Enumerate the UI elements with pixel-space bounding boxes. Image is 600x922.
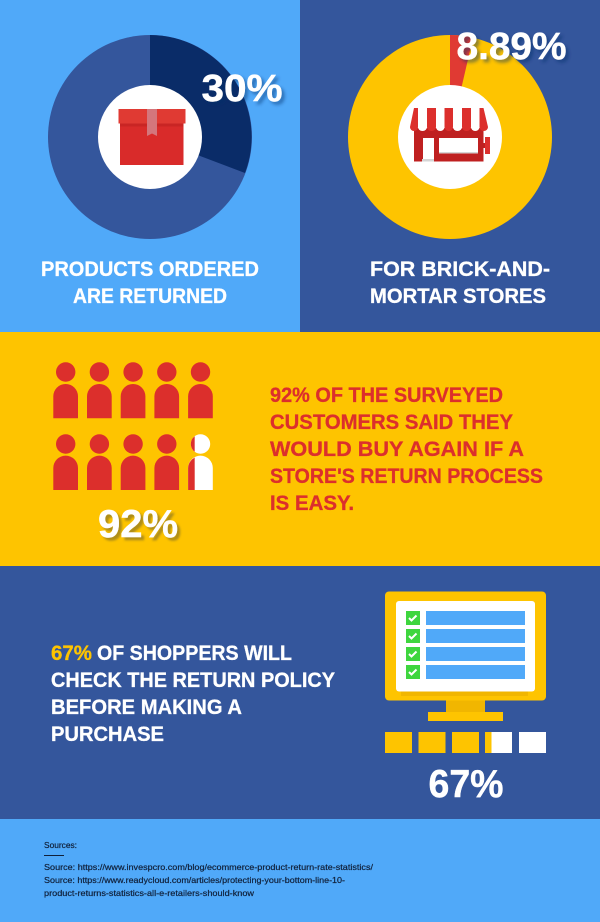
source list: Source: https://www.readycloud.com/articles/protecting-your-bottom-line-10- <box>44 876 345 885</box>
stat: 92%: 92% <box>98 503 178 546</box>
stat: 67%: 67% <box>428 763 504 806</box>
caption: for brick-and-mortar stores: FOR BRICK-AND- <box>370 258 550 281</box>
caption: for brick-and-mortar stores <box>370 258 550 308</box>
panel: brick-and-mortar stores <box>300 0 600 332</box>
text block: repeat purchase statement: 92% OF THE SURVEYED <box>270 384 503 407</box>
pictogram: ten people, 92% filled <box>53 362 213 490</box>
text block: repeat purchase statement: IS EASY. <box>270 492 354 515</box>
progress squares: 67% filled <box>385 732 546 753</box>
source list <box>44 863 374 898</box>
text block: repeat purchase statement: STORE'S RETURN PROCESS <box>270 465 543 488</box>
icon: monitor with checklist <box>385 592 546 721</box>
panel: return policy <box>0 566 600 819</box>
text block: return policy statement: PURCHASE <box>51 723 164 746</box>
text block: repeat purchase statement: CUSTOMERS SAID THEY <box>270 411 513 434</box>
stat: 30%: 30% <box>202 68 282 110</box>
panel: repeat customers <box>0 332 600 566</box>
donut chart: 8.89% returned <box>348 35 552 239</box>
sources heading: Sources: <box>44 841 77 850</box>
text block: repeat purchase statement <box>270 384 543 515</box>
icon: red box <box>118 109 186 165</box>
panel: products returned <box>0 0 300 332</box>
stat: 8.89%: 8.89% <box>456 26 566 68</box>
donut chart: 30% returned <box>48 35 252 239</box>
source list: product-returns-statistics-all-e-retailers-should-know <box>44 889 254 898</box>
text block: return policy statement: 67% <box>51 642 92 665</box>
caption: products ordered are returned <box>41 258 259 308</box>
text block: return policy statement <box>51 642 335 746</box>
panel: sources <box>0 819 600 922</box>
caption: products ordered are returned: PRODUCTS ORDERED <box>41 258 259 281</box>
icon: storefront <box>410 108 490 162</box>
source list: Source: https://www.invespcro.com/blog/ecommerce-product-return-rate-statistics/ <box>44 863 374 872</box>
caption: for brick-and-mortar stores: MORTAR STORES <box>370 285 546 308</box>
caption: products ordered are returned: ARE RETURNED <box>73 285 227 308</box>
text block: return policy statement: CHECK THE RETURN POLICY <box>51 669 335 692</box>
text block: return policy statement: BEFORE MAKING A <box>51 696 242 719</box>
text block: repeat purchase statement: WOULD BUY AGAIN IF A <box>270 438 524 461</box>
text block: return policy statement: OF SHOPPERS WILL <box>97 642 292 665</box>
